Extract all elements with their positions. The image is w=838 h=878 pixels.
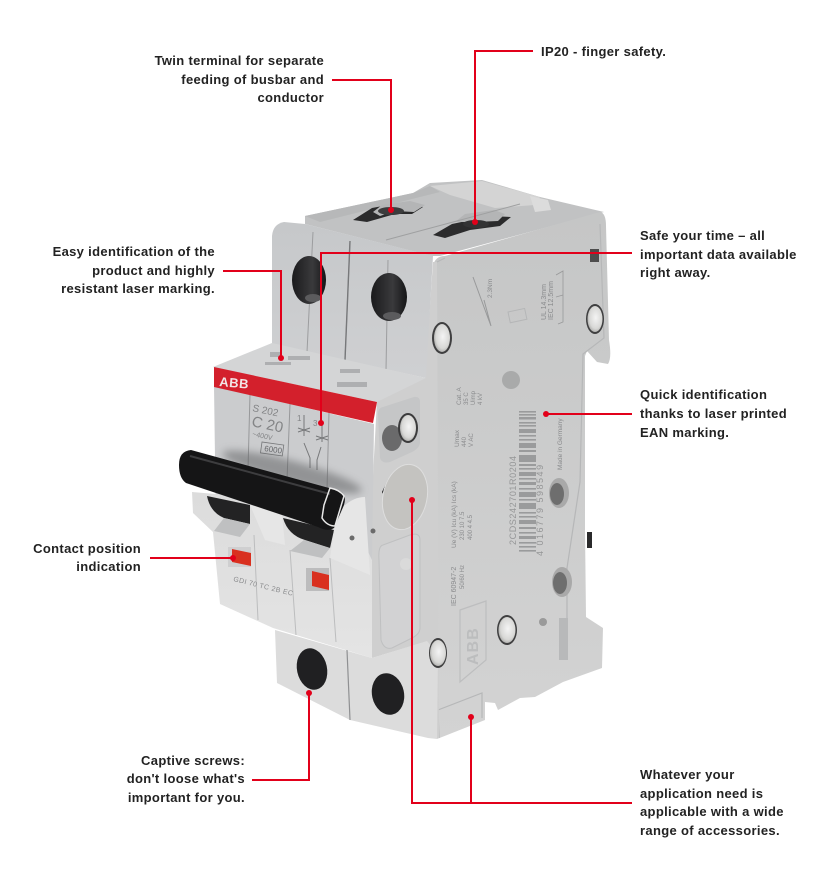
breaker device photo <box>179 180 610 739</box>
side panel laser markings: Uimp <box>471 390 477 405</box>
model marking: ~400V <box>252 431 273 442</box>
side panel laser markings: 2CDS242701R0204 <box>508 455 518 545</box>
callout: laser marking: resistant laser marking. <box>61 281 215 296</box>
side panel laser markings: V AC <box>469 433 475 447</box>
screws and side holes <box>429 304 604 668</box>
side panel laser markings: IEC 12.5mm <box>548 281 555 320</box>
callout: twin terminal: feeding of busbar and <box>181 72 324 87</box>
callout: EAN marking <box>543 387 787 440</box>
EAN barcode <box>519 411 536 552</box>
callout: laser marking: product and highly <box>92 263 215 278</box>
side panel laser markings: ABB <box>465 627 482 665</box>
bottom terminal block <box>275 630 438 739</box>
callout: data available <box>318 228 797 426</box>
side panel laser markings: Made in Germany <box>557 418 564 470</box>
dark cutouts <box>207 496 250 524</box>
callout: data available: right away. <box>640 265 711 280</box>
upper face with wire holes <box>272 222 433 378</box>
callout: accessories: Whatever your <box>640 767 735 782</box>
side panel laser markings: 35 C <box>464 392 470 405</box>
callout: contact position: indication <box>76 559 141 574</box>
side panel laser markings: Umax <box>454 429 461 447</box>
side panel inner lines <box>437 224 604 738</box>
callout: captive screws: Captive screws: <box>141 753 245 768</box>
model marking: S 202 <box>251 403 280 419</box>
side panel laser markings: 400 4 4.5 <box>468 514 474 540</box>
callout: IP20 finger safety: IP20 - finger safety. <box>541 44 666 59</box>
callout: accessories <box>409 497 784 838</box>
callout: EAN marking: Quick identification <box>640 387 767 402</box>
callout: accessories: applicable with a wide <box>640 804 784 819</box>
side column panels <box>350 397 433 648</box>
side panel laser markings: UL 14.3mm <box>541 284 548 320</box>
callout: data available: important data available <box>640 247 797 262</box>
callout: captive screws: important for you. <box>128 790 245 805</box>
callout: laser marking: Easy identification of the <box>53 244 215 259</box>
callout: laser marking <box>53 244 284 361</box>
callout: captive screws: don't loose what's <box>127 771 245 786</box>
side panel laser markings: 440 <box>462 436 468 447</box>
callout: data available: Safe your time – all <box>640 228 765 243</box>
side panel laser markings: 4 kV <box>478 393 484 405</box>
top lid with terminals <box>305 180 604 256</box>
rocker side piece <box>330 497 370 575</box>
contact position indicators <box>228 547 329 598</box>
front face <box>214 386 374 560</box>
ABB red strip <box>214 367 377 423</box>
side panel laser markings: 50/60 Hz <box>460 565 466 589</box>
callout: contact position: Contact position <box>33 541 141 556</box>
toggle shadow <box>220 443 364 501</box>
callout: IP20 finger safety <box>472 44 666 225</box>
side panel laser markings: Ue (V) Icu (kA) Ics (kA) <box>451 481 458 548</box>
model marking: 6000 <box>264 444 283 456</box>
callout: twin terminal: conductor <box>257 90 324 105</box>
shelf with laser marking <box>213 343 426 402</box>
callout: contact position <box>33 541 236 574</box>
callout: EAN marking: thanks to laser printed <box>640 406 787 421</box>
model marking: 3 <box>313 419 318 428</box>
side panel laser markings: 4 016779 598549 <box>535 463 545 556</box>
side panel laser markings: 2.3Nm <box>487 279 494 298</box>
middle column <box>368 262 439 738</box>
callout: accessories: range of accessories. <box>640 823 780 838</box>
side panel laser markings: 230 10 7.5 <box>460 511 466 540</box>
side panel <box>433 212 610 739</box>
callout: twin terminal <box>155 53 394 213</box>
model marking <box>250 403 328 470</box>
model marking: 1 <box>297 414 302 423</box>
side panel laser markings: Cat. A <box>456 387 463 405</box>
callout: accessories: application need is <box>640 786 763 801</box>
callout: twin terminal: Twin terminal for separate <box>155 53 324 68</box>
side panel laser markings: IEC 60947-2 <box>451 567 458 606</box>
side panel laser markings <box>451 271 564 665</box>
contact position indicators: GDI 70 TC 2B EC <box>233 576 294 598</box>
black toggle <box>179 450 345 530</box>
lower white body <box>192 492 372 658</box>
callout: EAN marking: EAN marking. <box>640 425 729 440</box>
ABB red strip: ABB <box>219 374 250 392</box>
callout: captive screws <box>127 690 312 805</box>
model marking: C 20 <box>250 413 285 437</box>
